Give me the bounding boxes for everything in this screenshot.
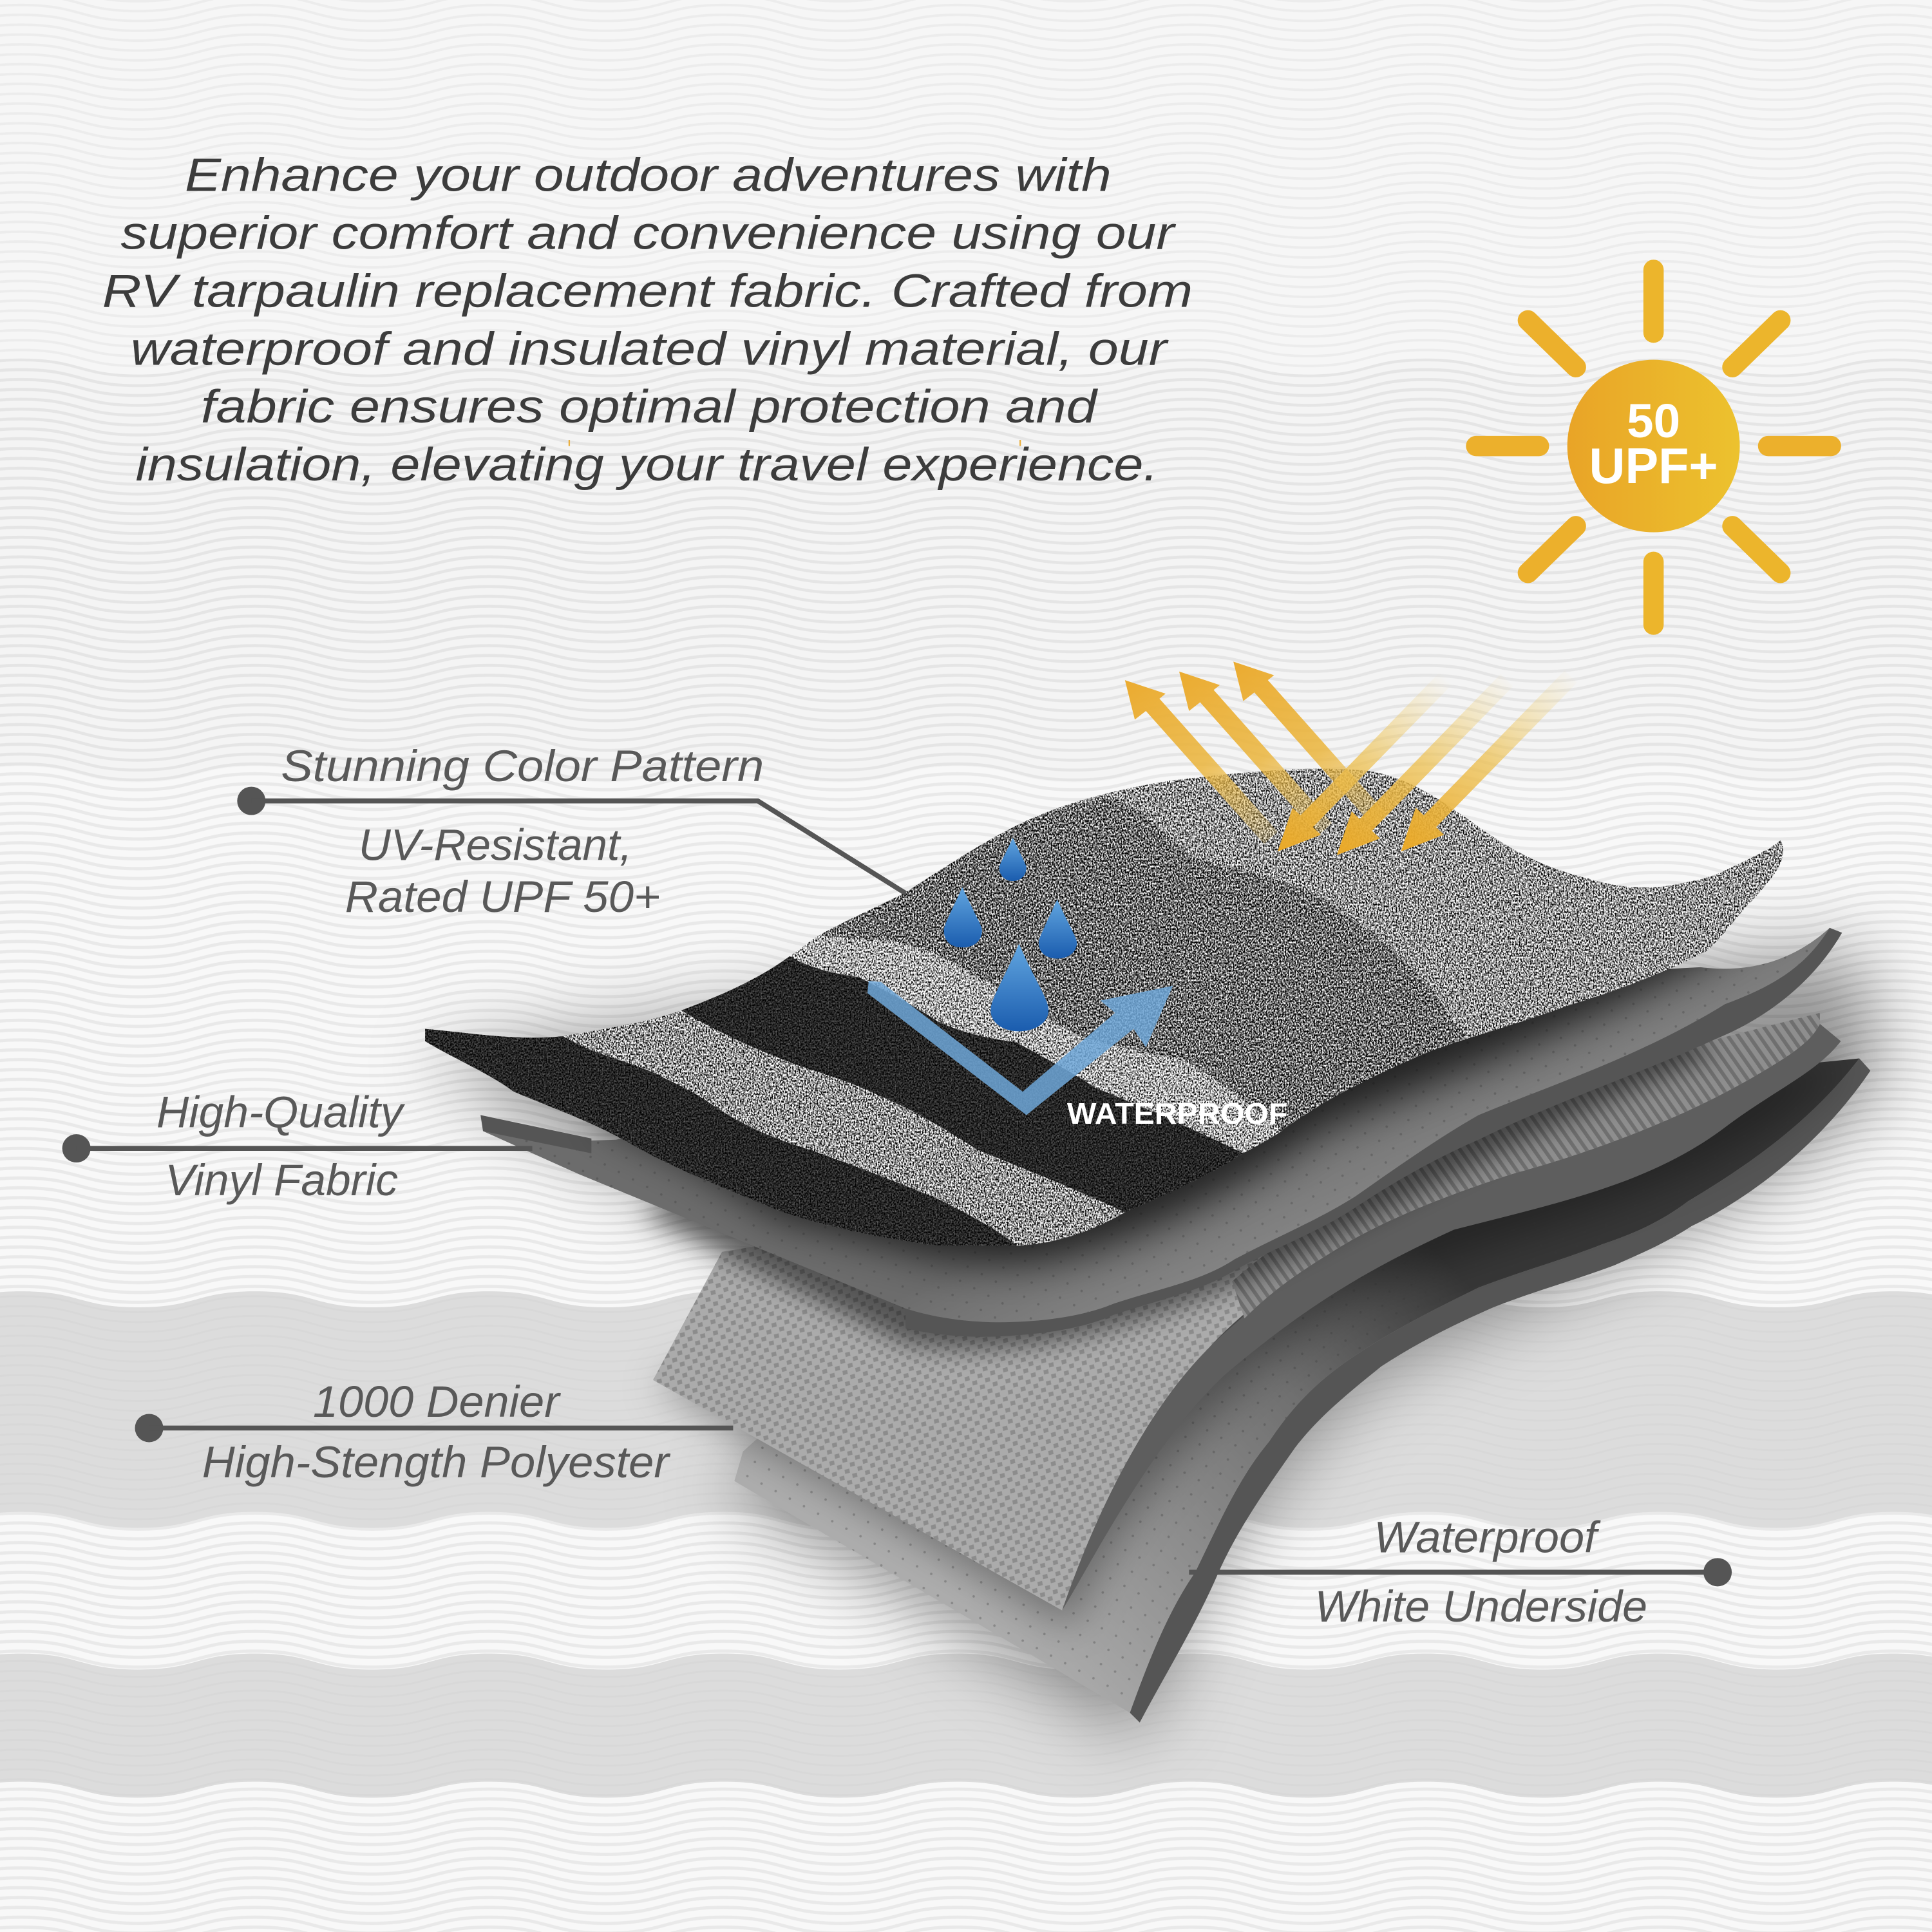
callout: stunning color pattern: UV-Resistant, <box>359 820 632 869</box>
darker mid region <box>819 799 1466 1131</box>
shadow of vinyl sheet on mesh <box>641 986 1716 1349</box>
intro paragraph: insulation, elevating your travel experience. <box>135 439 1158 491</box>
callout: stunning color pattern: Stunning Color Pattern <box>281 741 764 791</box>
black stripe 1 <box>425 1029 1016 1245</box>
callout: waterproof white underside: White Underside <box>1314 1582 1647 1631</box>
reflected sun arrows going up <box>1125 661 1386 844</box>
intro paragraph: RV tarpaulin replacement fabric. Crafted from <box>102 265 1193 317</box>
light stripe <box>790 935 1282 1153</box>
intro paragraph: fabric ensures optimal protection and <box>201 381 1099 433</box>
callout: 1000 denier polyester: 1000 Denier <box>313 1377 562 1426</box>
waterproof label: WATERPROOF <box>1067 1097 1287 1130</box>
icon: sun UPF 50+ badge: UPF+ <box>1589 439 1718 494</box>
layer: vinyl sheet <box>480 928 1842 1337</box>
icon: sun UPF 50+ badge: 50 <box>1627 393 1680 448</box>
intro paragraph <box>102 149 1193 491</box>
callout: waterproof white underside <box>1189 1513 1732 1631</box>
intro paragraph: Enhance your outdoor adventures with <box>185 149 1112 202</box>
layer: 1000 denier polyester mesh <box>653 1013 1841 1611</box>
soft drop shadow of the fabric stack on the background <box>425 949 1885 1738</box>
layer: white underside <box>734 1058 1870 1723</box>
callout: 1000 denier polyester <box>135 1377 733 1487</box>
callout: high-quality vinyl fabric: Vinyl Fabric <box>165 1155 398 1205</box>
black stripe 2 <box>681 956 1243 1213</box>
callout: stunning color pattern: Rated UPF 50+ <box>345 872 661 922</box>
intro paragraph: waterproof and insulated vinyl material, our <box>131 323 1169 375</box>
intro paragraph: superior comfort and convenience using our <box>120 207 1177 259</box>
panel: top fabric with stripes <box>425 769 1783 1245</box>
icon: sun UPF 50+ badge <box>1476 270 1831 625</box>
icon: water drops <box>944 838 1077 1031</box>
base mottled fabric <box>425 769 1783 1245</box>
callout: high-quality vinyl fabric: High-Quality <box>156 1088 405 1137</box>
incoming sun arrows going down <box>1278 670 1577 855</box>
callout: waterproof white underside: Waterproof <box>1374 1513 1602 1562</box>
callout: high-quality vinyl fabric <box>62 1088 533 1205</box>
layer shadow under polyester <box>653 1059 1848 1627</box>
callout: stunning color pattern <box>237 741 905 922</box>
shadow of top fabric on vinyl sheet <box>583 967 1734 1287</box>
waterproof deflection arrow <box>867 981 1173 1115</box>
callout: 1000 denier polyester: High-Stength Polyester <box>202 1437 671 1487</box>
